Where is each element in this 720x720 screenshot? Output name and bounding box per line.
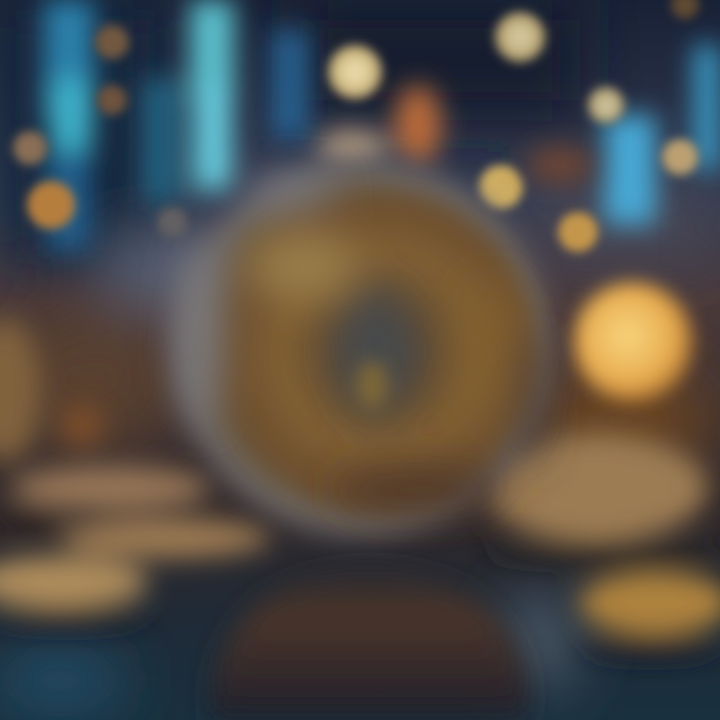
coin outer rim (174, 160, 550, 536)
reflection sphere (210, 570, 530, 720)
coin face (225, 197, 535, 507)
large golden orb (573, 282, 693, 402)
stacked coins: right (480, 434, 720, 658)
blue light columns (44, 0, 720, 250)
orange glow and pale blocks behind coin (316, 85, 594, 185)
coin center mark (356, 361, 388, 409)
coin highlights (178, 172, 548, 515)
bokeh lights (13, 0, 699, 252)
left side coin (0, 318, 104, 462)
stacked coins: left (0, 466, 270, 627)
central coin (174, 160, 550, 536)
